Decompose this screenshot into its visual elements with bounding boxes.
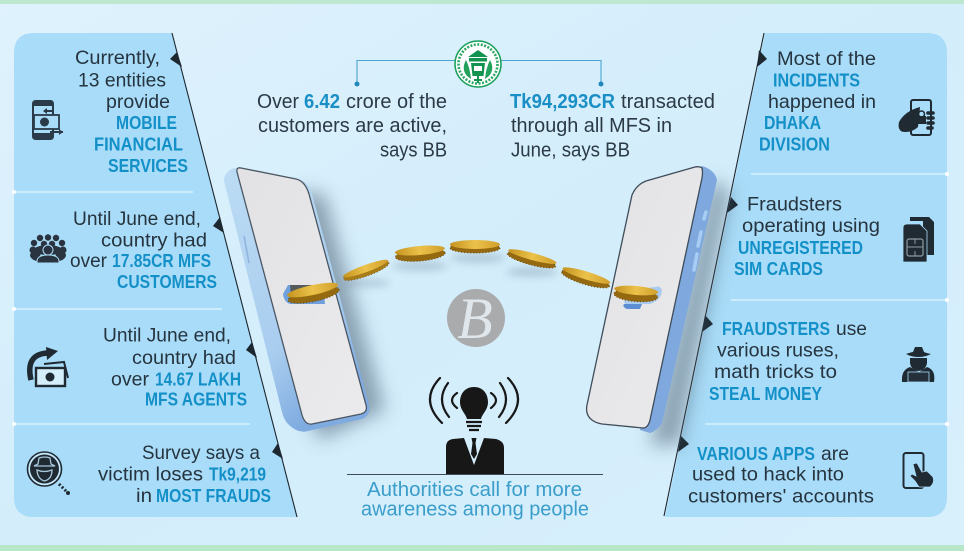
icon: money with arrow (30, 347, 68, 386)
fact: customers: country had (101, 230, 207, 252)
fact: loss per fraud: Tk9,219 (209, 464, 266, 484)
fact: ruses: various ruses, (717, 340, 839, 362)
fact: agents: Until June end, (103, 324, 231, 346)
marker (757, 50, 767, 67)
fact: 13 entities: SERVICES (108, 155, 188, 176)
icon: spy at laptop (902, 347, 934, 382)
fact: loss per fraud: in (136, 485, 152, 507)
call to action text: Authorities call for more (367, 478, 582, 501)
fact: customers: CUSTOMERS (117, 271, 217, 292)
marker (272, 443, 283, 459)
marker (727, 197, 738, 213)
fact: loss per fraud (98, 442, 271, 507)
slot in screen (624, 286, 662, 304)
panel: left facts (12, 33, 297, 517)
fact: hacking apps: used to hack into (692, 464, 844, 486)
fact: 13 entities: provide (106, 91, 170, 113)
fact: agents: 14.67 LAKH (155, 368, 241, 390)
connector lines from logo (354, 60, 604, 86)
statistic: active customers: crore of the (346, 91, 447, 113)
statistic: active customers: customers are active, (258, 115, 447, 137)
illustration: left phone (224, 168, 369, 432)
fact: 13 entities: 13 entities (78, 70, 166, 92)
statistic: amount transacted: through all MFS in (511, 115, 672, 137)
slot in screen (283, 285, 325, 304)
fact: 13 entities: Currently, (75, 47, 160, 69)
marker (170, 52, 182, 67)
fact: Dhaka incidents: happened in (768, 91, 876, 113)
icon: phone with cash (33, 101, 63, 139)
fact: customers: Until June end, (73, 208, 201, 230)
fact: unregistered SIMs: SIM CARDS (734, 258, 823, 279)
marker (678, 436, 689, 452)
marker (213, 217, 224, 233)
fact: agents: MFS AGENTS (145, 388, 247, 410)
fact: Dhaka incidents: Most of the (777, 48, 876, 70)
statistic: active customers (257, 91, 447, 162)
fact: ruses: FRAUDSTERS (722, 318, 830, 339)
statistic: active customers: 6.42 (304, 91, 340, 113)
fact: Dhaka incidents (759, 48, 876, 154)
statistic: amount transacted: Tk94,293CR (510, 91, 616, 113)
fact: hacking apps: are (821, 443, 849, 465)
fact: agents: over (111, 368, 150, 390)
fact: ruses: math tricks to (714, 361, 837, 383)
statistic: amount transacted: June, says BB (511, 140, 630, 162)
icon: magnifier over hacker (28, 452, 70, 495)
fact: hacking apps: customers' accounts (688, 486, 874, 508)
icon: SIM cards (903, 217, 934, 262)
fact: loss per fraud: Survey says a (142, 442, 260, 464)
icon: person with light-bulb head (430, 378, 518, 474)
fact: unregistered SIMs (734, 194, 880, 279)
fact: unregistered SIMs: Fraudsters (747, 194, 842, 216)
fact: hacking apps: VARIOUS APPS (697, 443, 815, 464)
fact: 13 entities: FINANCIAL (94, 134, 183, 154)
fact: unregistered SIMs: operating using (742, 215, 880, 237)
fact: customers: 17.85CR MFS (112, 250, 211, 271)
fact: 13 entities: MOBILE (116, 112, 177, 133)
fact: 13 entities (75, 47, 188, 176)
fact: ruses: STEAL MONEY (709, 383, 823, 404)
fact: agents (103, 324, 247, 410)
statistic: amount transacted: transacted (621, 91, 715, 113)
panel: right facts (664, 33, 949, 517)
fact: hacking apps (688, 443, 874, 508)
icon: finger touching phone (904, 453, 934, 488)
illustration: flying coins (286, 240, 659, 307)
fact: Dhaka incidents: DHAKA (764, 112, 821, 133)
call to action text: awareness among people (361, 498, 589, 520)
fact: ruses (709, 318, 867, 404)
fact: customers: over (70, 250, 107, 272)
fact: agents: country had (132, 347, 236, 369)
marker (246, 342, 257, 358)
phone shadows (300, 180, 730, 445)
logo: B watermark: B (457, 286, 493, 351)
statistic: active customers: says BB (380, 140, 447, 162)
statistic: amount transacted (510, 91, 715, 162)
bottom green strip (0, 545, 964, 551)
icon: Bangladesh Bank logo (455, 41, 501, 87)
logo: B watermark (447, 286, 505, 351)
fact: Dhaka incidents: INCIDENTS (773, 70, 860, 90)
illustration: right phone (587, 166, 717, 433)
fact: loss per fraud: MOST FRAUDS (156, 485, 271, 506)
fact: loss per fraud: victim loses (98, 464, 203, 486)
call to action text (361, 478, 589, 520)
fact: Dhaka incidents: DIVISION (759, 134, 830, 154)
divider under person (347, 474, 603, 476)
icon: crowd of people (30, 234, 66, 263)
fact: ruses: use (836, 318, 867, 340)
marker (702, 315, 713, 332)
top green strip (0, 0, 964, 4)
fact: customers (70, 208, 217, 292)
icon: hand holding locked phone (899, 100, 933, 135)
statistic: active customers: Over (257, 91, 299, 113)
fact: unregistered SIMs: UNREGISTERED (738, 237, 863, 258)
